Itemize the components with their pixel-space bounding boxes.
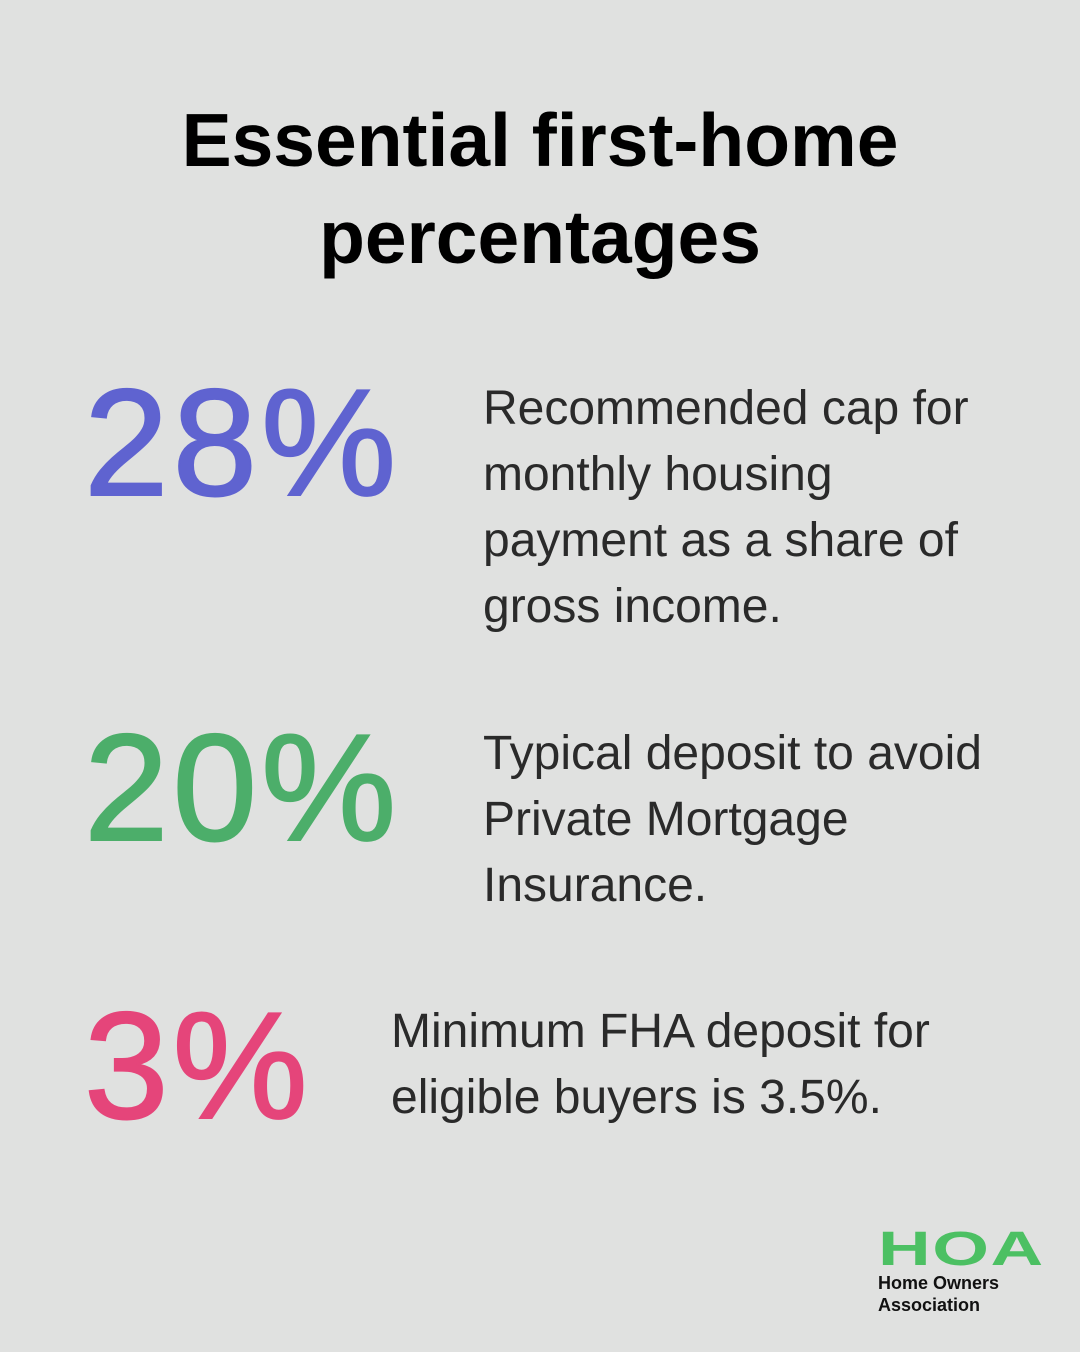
title <box>182 98 898 279</box>
logo subtitle: Home Owners <box>878 1273 999 1293</box>
text: 28% description: Recommended cap for <box>483 382 969 435</box>
logo subtitle: Association <box>878 1295 980 1315</box>
logo: HOA <box>878 1223 1045 1315</box>
text: 20% description <box>483 727 982 912</box>
stat: 20%: 20% <box>84 703 400 873</box>
text: 3% description <box>391 1005 930 1124</box>
text: 3% description: eligible buyers is 3.5%. <box>391 1071 882 1124</box>
stat: 3%: 3% <box>84 981 312 1151</box>
text: 20% description: Private Mortgage <box>483 793 849 846</box>
text: 20% description: Typical deposit to avoid <box>483 727 982 780</box>
text: 3% description: Minimum FHA deposit for <box>391 1005 930 1058</box>
stat: 28%: 28% <box>84 358 400 528</box>
text: 28% description <box>483 382 969 633</box>
text: 28% description: gross income. <box>483 580 782 633</box>
logo wordmark: HOA <box>878 1223 1045 1276</box>
text: 28% description: payment as a share of <box>483 514 958 567</box>
text: 20% description: Insurance. <box>483 859 707 912</box>
text: 28% description: monthly housing <box>483 448 833 501</box>
title: percentages <box>319 195 761 279</box>
logo subtitle <box>878 1273 999 1315</box>
title: Essential first-home <box>182 98 898 182</box>
